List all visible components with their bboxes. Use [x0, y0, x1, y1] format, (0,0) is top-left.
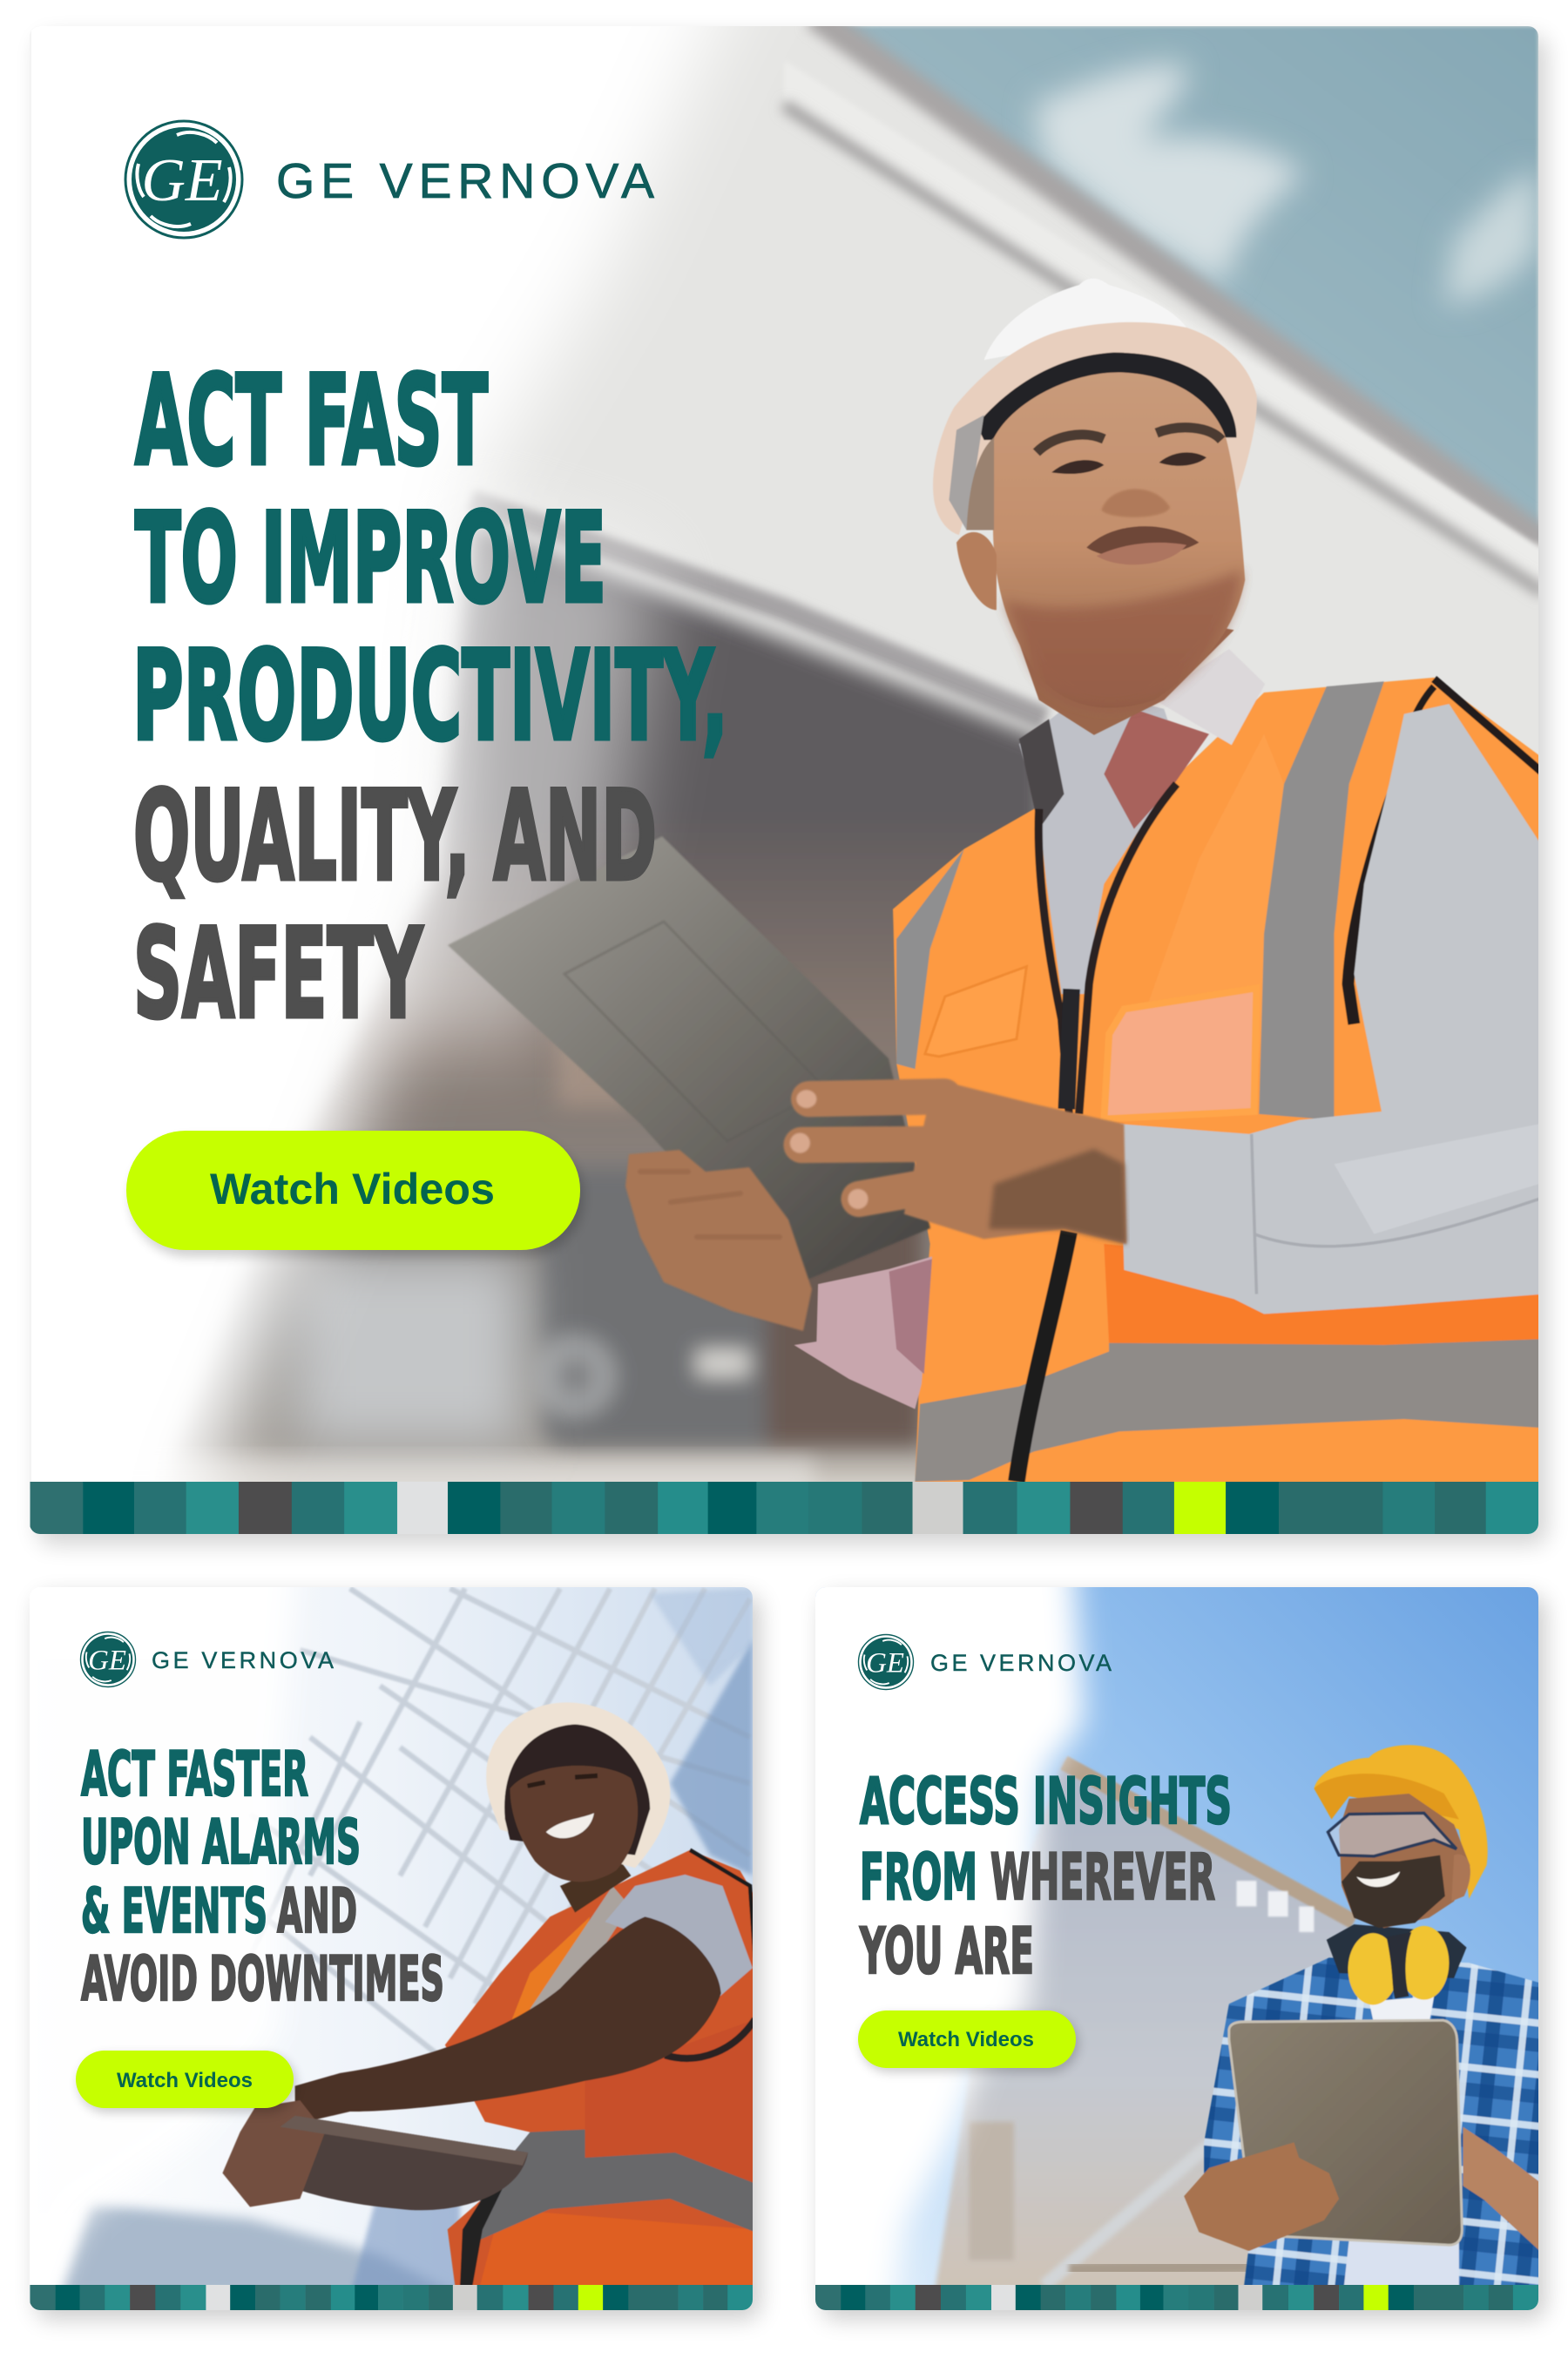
- panel: act faster card: [0, 1414, 760, 2372]
- icon: GE monogram: GE: [866, 1647, 904, 1679]
- logo: GE Vernova: GE VERNOVA: [930, 1650, 1112, 1676]
- icon: GE monogram: [81, 1632, 135, 1686]
- panel: hero banner: [0, 0, 1547, 1655]
- heading: access insights: YOU ARE: [859, 1915, 1034, 1989]
- logo: GE Vernova: GE VERNOVA: [276, 153, 654, 209]
- logo: GE Vernova: GE VERNOVA: [152, 1647, 334, 1673]
- logo: GE Vernova: [81, 1632, 334, 1686]
- panel edge: [30, 26, 31, 1490]
- button: watch videos: [858, 2010, 1078, 2072]
- heading: access insights: [859, 1765, 1232, 1989]
- heading: act faster: & EVENTS: [81, 1875, 267, 1947]
- worker head with white hard hat: [933, 279, 1257, 735]
- logo: GE Vernova: [859, 1635, 1112, 1689]
- heading: hero: TO IMPROVE: [135, 487, 606, 631]
- hands: [625, 1079, 1126, 1331]
- button: watch videos: Watch Videos: [898, 2028, 1034, 2051]
- icon: GE monogram: GE: [141, 147, 223, 214]
- heading: act faster: ACT FASTER: [81, 1739, 308, 1810]
- heading: act faster: AND: [277, 1875, 357, 1947]
- heading: hero: ACT FAST: [135, 349, 488, 493]
- worker with plaid shirt and tablet: [1184, 1745, 1542, 2286]
- button: watch videos: [76, 2051, 296, 2112]
- heading: hero: PRODUCTIVITY,: [132, 625, 728, 768]
- photo: worker under steel roof: [0, 1414, 755, 2372]
- heading: access insights: ACCESS INSIGHTS: [860, 1765, 1232, 1839]
- button: watch videos: Watch Videos: [210, 1165, 495, 1213]
- tablet: [448, 836, 930, 1287]
- pixel colour strip: [815, 2285, 1538, 2310]
- heading: hero: [132, 349, 728, 1046]
- heading: act faster: UPON ALARMS: [81, 1807, 361, 1878]
- icon: GE monogram: [859, 1635, 913, 1689]
- heading: hero: SAFETY: [133, 902, 423, 1046]
- photo: worker in orange vest with tablet: [30, 26, 1538, 1490]
- button: watch videos: [126, 1131, 584, 1257]
- heading: access insights: FROM: [860, 1841, 977, 1915]
- icon: GE monogram: GE: [88, 1645, 126, 1676]
- heading: act faster: AVOID DOWNTIMES: [81, 1943, 444, 2015]
- pixel colour strip: [30, 2285, 753, 2310]
- worker with white hard hat and orange vest: [222, 1702, 755, 2286]
- worker body and vest: [794, 649, 1544, 1484]
- heading: act faster: [81, 1739, 444, 2015]
- heading: access insights: WHEREVER: [990, 1841, 1215, 1915]
- heading: hero: QUALITY, AND: [133, 765, 657, 909]
- panel: access insights card: [634, 1414, 1545, 2372]
- button: watch videos: Watch Videos: [117, 2069, 253, 2092]
- photo: worker with yellow hard hat: [634, 1414, 1542, 2372]
- icon: GE monogram: [125, 121, 242, 238]
- logo: GE Vernova: [125, 121, 654, 238]
- pixel colour strip: [30, 1482, 1539, 1534]
